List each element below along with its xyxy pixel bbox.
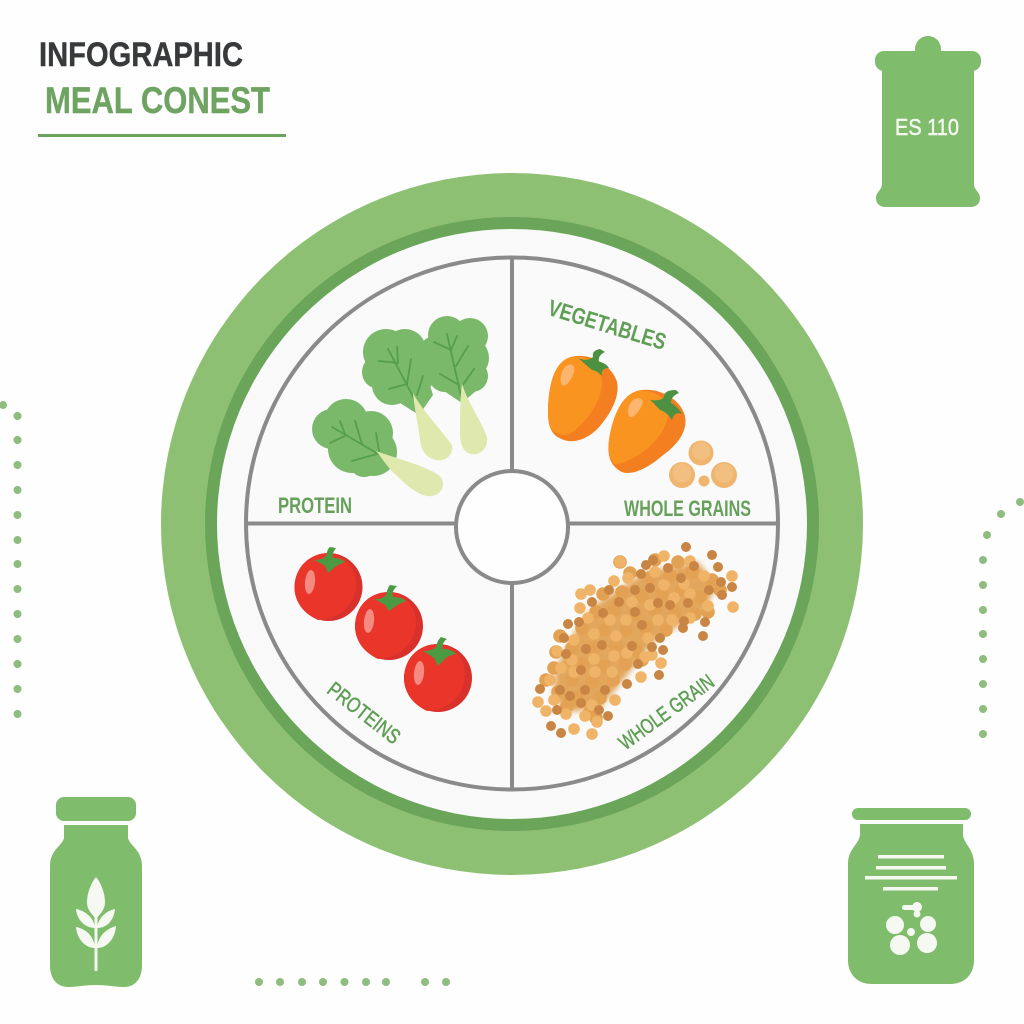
tomato one — [294, 547, 362, 621]
decorative dots: left — [0, 401, 22, 718]
label lines — [865, 855, 957, 890]
label: vegetables: VEGETABLES — [545, 294, 669, 355]
icon: bottom left jar with plant — [50, 797, 142, 987]
subtitle: meal conest: MEAL CONEST — [45, 80, 270, 121]
food: leafy greens — [312, 316, 489, 496]
label: protein: PROTEIN — [278, 493, 352, 518]
food: orange peppers — [548, 349, 737, 488]
pepper one — [548, 349, 618, 441]
grains symbol — [886, 902, 937, 955]
plant symbol — [76, 877, 116, 971]
tomato two — [355, 585, 423, 660]
food: tomatoes — [294, 547, 472, 712]
plate center circle — [456, 471, 568, 583]
tomato three — [404, 637, 472, 712]
title: infographic: INFOGRAPHIC — [39, 36, 243, 74]
icon: top right canister — [875, 36, 981, 207]
label: whole grains: WHOLE GRAINS — [624, 496, 751, 521]
label: proteins: PROTEINS — [323, 678, 405, 749]
peas — [669, 440, 737, 488]
pepper two — [608, 390, 685, 473]
leaf back right — [417, 316, 489, 454]
label: whole grain: WHOLE GRAIN — [615, 670, 719, 755]
decorative dots: right — [979, 498, 1024, 738]
title block — [38, 36, 286, 137]
food: whole grain pile — [532, 542, 739, 740]
leaf front — [312, 399, 443, 496]
icon: bottom right jar with lines — [848, 808, 974, 984]
plate — [161, 173, 863, 875]
decorative dots: bottom — [255, 978, 450, 986]
leaf back left — [362, 329, 452, 460]
title underline — [38, 134, 286, 137]
canister label: ES 110 — [895, 114, 959, 140]
